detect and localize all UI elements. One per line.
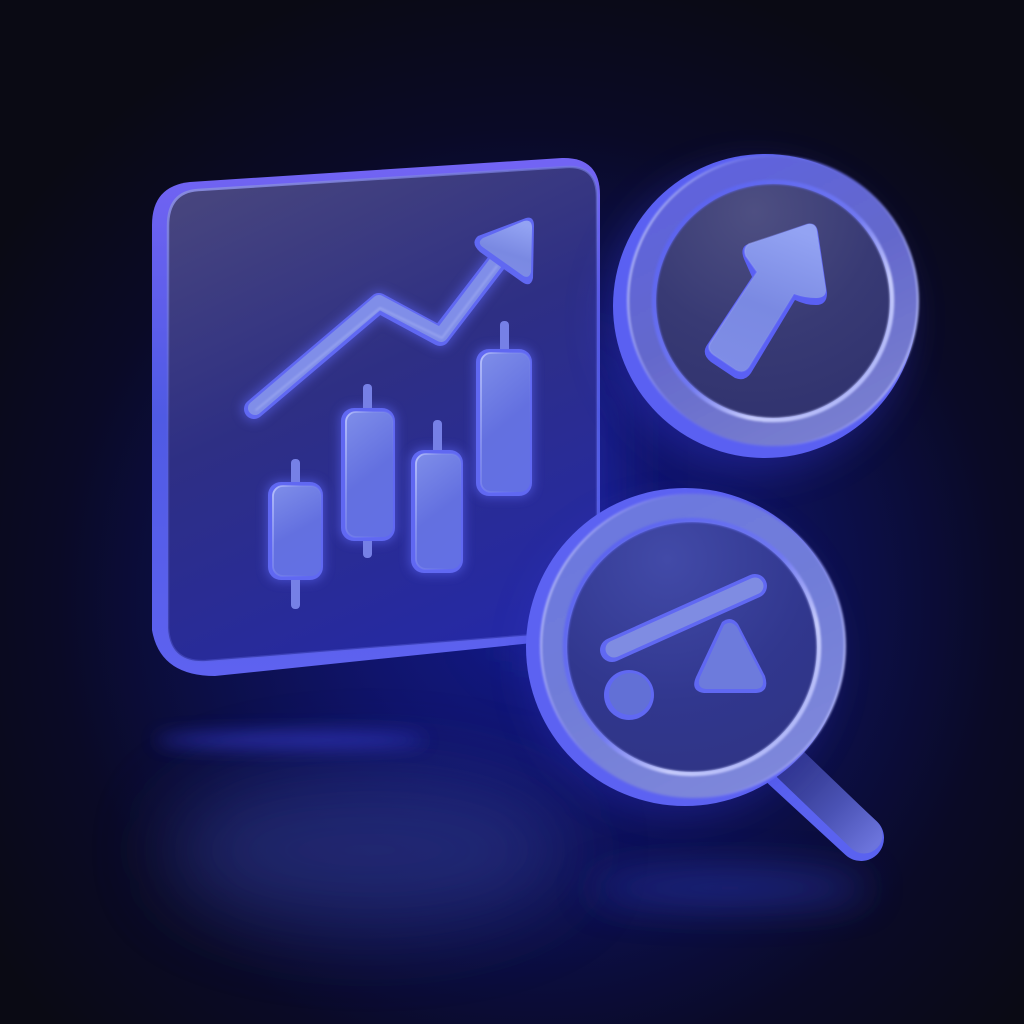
up arrow: [705, 224, 827, 379]
lens groove ring: [565, 520, 819, 774]
lens triangle: [694, 619, 766, 693]
coin groove ring: [654, 182, 892, 420]
candlestick 3: [409, 420, 465, 575]
lens glow: [530, 510, 830, 810]
panel edge: [152, 158, 600, 676]
coin inner face: [656, 184, 890, 418]
lens sloped bar: [612, 586, 755, 650]
coin back edge: [613, 154, 917, 458]
candlestick 1: [266, 459, 325, 609]
lens face: [567, 522, 817, 772]
coin glow: [605, 170, 905, 470]
line chart arrow: [254, 218, 534, 410]
lens circle: [604, 670, 654, 720]
icon: magnifying glass: [526, 488, 864, 838]
candlestick 2: [339, 384, 397, 558]
floor reflection: [155, 733, 870, 925]
coin front ring: [628, 156, 918, 446]
panel glow: [520, 330, 600, 640]
icon: coin with up arrow: [605, 154, 918, 470]
panel face: [168, 167, 597, 661]
lens back edge: [526, 488, 844, 806]
panel: chart card: [152, 158, 600, 676]
magnifier handle: [785, 764, 864, 838]
candlestick 4: [474, 321, 534, 498]
lens front ring: [541, 494, 845, 798]
